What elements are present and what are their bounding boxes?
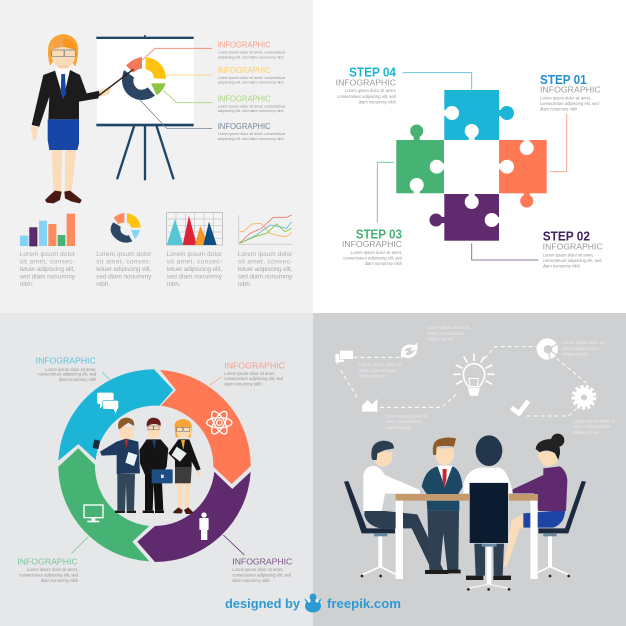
person: seated from behind	[463, 435, 513, 591]
puzzle connector lines	[377, 73, 567, 260]
footer: designed by freepik.com	[225, 594, 401, 612]
heading and text: green item: INFOGRAPHIC	[218, 94, 271, 104]
heading and text: orange item: adipiscing elit, sed diam nonummy nibh	[218, 54, 284, 59]
ring: orange arrow	[160, 370, 251, 484]
heading and text: orange item: INFOGRAPHIC	[218, 40, 271, 50]
text: caption under area chart: Lorem ipsum dolor	[167, 251, 223, 258]
text: step 04: STEP 04	[349, 65, 397, 80]
text: blue item label: diam nonummy nibh	[59, 377, 97, 382]
text: note by refresh: adipiscing elit	[427, 336, 454, 342]
chair: right	[532, 481, 586, 577]
text: caption under area chart	[167, 251, 223, 288]
chart: small donut	[111, 213, 141, 243]
text: caption under area chart: tetuer adipiscing elit,	[167, 266, 222, 273]
text: note by pie: Lorem ipsum dolor sit	[562, 340, 605, 345]
text: note by refresh	[427, 325, 470, 342]
text: caption under bar chart: tetuer adipiscing elit,	[20, 266, 75, 273]
text: note by refresh: amet, consectetuer	[427, 331, 465, 336]
icon: freepik logo	[304, 594, 322, 612]
text: green item label: Lorem ipsum dolor sit amet,	[27, 567, 78, 572]
text: caption under line chart: Lorem ipsum dolor	[238, 251, 293, 258]
text: orange item label: consectetuer adipiscing elit, sed	[224, 376, 284, 381]
text: purple item label: INFOGRAPHIC	[232, 557, 292, 567]
text: step 04: diam nonummy nibh	[359, 100, 397, 104]
text: step 04: consectetuer adipiscing elit, sed	[337, 94, 397, 99]
heading and text: yellow item	[218, 65, 286, 85]
illustration: presentation board	[96, 35, 212, 179]
person: woman on right	[503, 434, 567, 567]
figure: man in black suit	[139, 418, 173, 513]
text: purple item label: Lorem ipsum dolor sit amet,	[232, 567, 283, 572]
text: caption under line chart: sed diam nonummy	[238, 273, 293, 280]
text: step 03: consectetuer adipiscing elit, sed	[343, 256, 403, 260]
text: step 02: diam nonummy nibh	[543, 264, 581, 268]
text: caption under area chart: sed diam nonummy	[167, 273, 223, 280]
text: caption under area chart: sit amet, consec-	[167, 258, 222, 266]
text: note under gear: Lorem ipsum dolor sit	[573, 418, 616, 424]
heading and text: yellow item: INFOGRAPHIC	[218, 65, 271, 75]
text: note by pie: adipiscing elit	[562, 352, 589, 356]
heading and text: green item: Lorem ipsum dolor sit amet, consectetuer	[218, 103, 286, 108]
puzzle: blue piece	[444, 90, 514, 140]
icon: atom	[207, 409, 232, 436]
chair: left	[344, 481, 396, 577]
chart: bar chart	[20, 214, 75, 246]
ring leader lines	[72, 372, 244, 555]
figure: woman in black suit	[168, 419, 202, 514]
text: caption under donut: nibh.	[96, 281, 110, 288]
text: note by refresh: Lorem ipsum dolor sit	[427, 325, 470, 330]
icon: light bulb	[453, 354, 495, 395]
heading and text: yellow item: Lorem ipsum dolor sit amet, consectetuer	[218, 75, 286, 80]
text: caption under line chart: sit amet, consec-	[238, 258, 292, 266]
icon: growth chart	[362, 399, 377, 412]
ring: purple arrow	[137, 472, 251, 562]
icon: check mark	[511, 401, 528, 413]
text: note under growth chart: amet, consectetuer	[385, 419, 423, 424]
text: caption under donut: sed diam nonummy	[96, 273, 152, 280]
text: caption under line chart: nibh.	[238, 281, 252, 288]
heading and text: yellow item: adipiscing elit, sed diam nonummy nibh	[218, 80, 284, 85]
text: note under growth chart: Lorem ipsum dolor sit	[385, 414, 428, 418]
text: note under growth chart: adipiscing elit	[385, 425, 412, 430]
illustration: meeting scene	[344, 434, 586, 591]
text: green item label: INFOGRAPHIC	[17, 557, 78, 567]
text: note under chat: amet, consectetuer	[359, 368, 397, 373]
heading and text: navy item: INFOGRAPHIC	[218, 121, 271, 131]
heading and text: orange item	[218, 40, 286, 59]
text: step 02: Lorem ipsum dolor sit amet,	[543, 252, 594, 258]
text: blue item label: INFOGRAPHIC	[36, 356, 96, 366]
text: caption under bar chart: sed diam nonummy	[20, 273, 76, 280]
text: caption under bar chart: Lorem ipsum dolor	[20, 251, 76, 258]
text: orange item label: Lorem ipsum dolor sit amet,	[224, 371, 275, 376]
text: step 01: INFOGRAPHIC	[540, 85, 601, 95]
chair back: front	[469, 483, 508, 543]
text: caption under donut: tetuer adipiscing elit,	[96, 266, 152, 273]
person: standing man	[422, 437, 463, 574]
icon: gear	[573, 386, 595, 408]
text: note under chat: adipiscing elit	[359, 374, 386, 378]
text: purple item label: consectetuer adipiscing elit, sed	[232, 572, 292, 578]
chart: line chart	[239, 215, 292, 244]
text: note under gear: amet, consectetuer	[573, 424, 611, 429]
text: step 03: diam nonummy nibh	[365, 261, 403, 266]
chart: presentation donut	[122, 57, 166, 100]
table	[396, 494, 538, 579]
text: step 02: INFOGRAPHIC	[543, 241, 603, 251]
icon: pie chart	[537, 338, 560, 362]
dashed connectors	[341, 347, 587, 416]
icon: speech bubbles	[97, 393, 119, 414]
text: step 02: STEP 02	[543, 229, 590, 244]
heading and text: navy item: adipiscing elit, sed diam nonummy nibh	[218, 136, 284, 141]
text: caption under line chart: tetuer adipiscing elit,	[238, 266, 293, 273]
text: step 01	[540, 72, 601, 112]
text: caption under bar chart: nibh.	[20, 281, 34, 288]
ring: green arrow	[58, 448, 149, 561]
text: note under gear: adipiscing elit	[573, 430, 600, 435]
panel: ring background	[0, 313, 313, 626]
heading and text: orange item: Lorem ipsum dolor sit amet, consectetuer	[218, 50, 286, 55]
text: step 03	[342, 226, 403, 266]
text: step 01: STEP 01	[540, 72, 587, 87]
illustration: business team	[92, 418, 202, 514]
text: orange item label: INFOGRAPHIC	[224, 360, 285, 370]
panel: puzzle background	[313, 0, 626, 313]
text: purple item label	[232, 557, 292, 583]
text: note by pie: amet, consectetuer	[562, 346, 600, 351]
text: step 03: STEP 03	[356, 226, 402, 241]
text: step 04: INFOGRAPHIC	[336, 78, 396, 88]
icon: chat	[335, 350, 353, 364]
panel: meeting background	[313, 313, 626, 626]
heading and text: navy item: Lorem ipsum dolor sit amet, consectetuer	[218, 131, 286, 136]
heading and text: navy item	[218, 121, 286, 141]
text: orange item label	[224, 360, 285, 386]
text: step 01: diam nonummy nibh	[540, 106, 578, 112]
text: caption under line chart	[238, 251, 293, 288]
text: step 01: Lorem ipsum dolor sit amet,	[540, 96, 591, 100]
text: caption under bar chart: sit amet, consec-	[20, 258, 75, 266]
text: blue item label	[36, 356, 97, 382]
text: note under gear	[573, 418, 616, 435]
text: step 04	[336, 65, 397, 104]
heading and text: green item	[218, 94, 286, 113]
connector lines	[140, 48, 212, 128]
text: step 03: Lorem ipsum dolor sit amet,	[351, 250, 402, 255]
chart: area triangles	[167, 213, 222, 245]
text: green item label	[17, 557, 79, 583]
text: step 03: INFOGRAPHIC	[342, 239, 402, 249]
puzzle: purple piece	[430, 194, 499, 241]
text: step 02	[543, 229, 603, 268]
text: purple item label: diam nonummy nibh	[232, 578, 270, 583]
text: step 02: consectetuer adipiscing elit, sed	[543, 258, 602, 263]
icon: monitor	[84, 505, 103, 522]
icon: person	[199, 512, 209, 540]
footer: designed by freepik.com: designed by	[225, 596, 301, 611]
figure: man in navy suit	[92, 418, 140, 513]
panel: presenter background	[0, 0, 313, 313]
text: green item label: consectetuer adipiscing elit, sed	[19, 572, 79, 578]
person: left man	[363, 441, 448, 574]
text: caption under donut: sit amet, consec-	[96, 258, 151, 266]
footer: designed by freepik.com: freepik.com	[327, 596, 401, 611]
text: note by pie	[562, 340, 605, 356]
text: step 01: consectetuer adipiscing elit, sed	[540, 101, 599, 106]
text: note under chat: Lorem ipsum dolor sit	[359, 362, 402, 367]
illustration: businesswoman presenter	[31, 34, 133, 203]
heading and text: green item: adipiscing elit, sed diam nonummy nibh	[218, 108, 284, 113]
text: orange item label: diam nonummy nibh	[224, 382, 262, 386]
text: note under growth chart	[385, 414, 428, 430]
text: green item label: diam nonummy nibh	[41, 578, 79, 583]
text: blue item label: consectetuer adipiscing elit, sed	[38, 372, 97, 377]
text: step 04: Lorem ipsum dolor sit amet,	[345, 88, 396, 93]
puzzle: orange piece	[499, 140, 547, 208]
text: caption under bar chart	[20, 251, 76, 288]
text: caption under area chart: nibh.	[167, 281, 181, 288]
icon: refresh	[401, 342, 417, 359]
puzzle: green piece	[396, 124, 444, 194]
text: caption under donut: Lorem ipsum dolor	[96, 251, 152, 258]
text: caption under donut	[96, 251, 152, 288]
text: blue item label: Lorem ipsum dolor sit amet,	[45, 367, 96, 372]
ring: blue arrow	[58, 369, 173, 461]
text: note under chat	[359, 362, 402, 378]
